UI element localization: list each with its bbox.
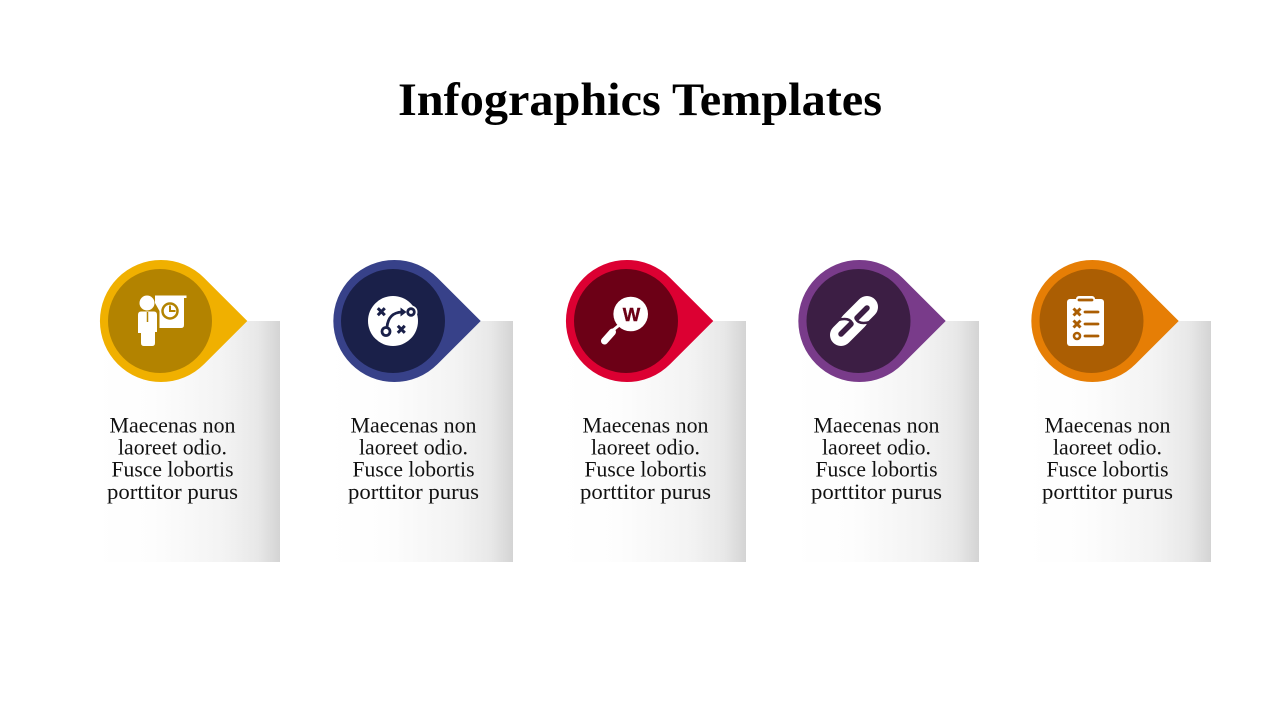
teardrop pin bbox=[333, 260, 481, 382]
body text: Maecenas non bbox=[350, 412, 476, 438]
inner circle bbox=[341, 269, 445, 373]
body text: porttitor purus bbox=[348, 479, 479, 504]
teardrop pin bbox=[566, 260, 713, 382]
body text: Maecenas non bbox=[814, 412, 940, 438]
body text bbox=[1042, 412, 1173, 504]
icon: chain link bbox=[838, 307, 870, 335]
body text bbox=[580, 412, 711, 504]
card background bbox=[1026, 321, 1211, 562]
icon: clipboard checklist bbox=[1067, 296, 1104, 346]
body text: porttitor purus bbox=[107, 479, 238, 504]
body text: laoreet odio. bbox=[822, 434, 931, 460]
body text: porttitor purus bbox=[811, 479, 942, 504]
panel: card 5 checklist bbox=[1026, 260, 1211, 562]
body text bbox=[348, 412, 479, 504]
body text: Fusce lobortis bbox=[816, 456, 938, 482]
inner circle bbox=[108, 269, 212, 373]
panel: card 2 strategy bbox=[328, 260, 513, 562]
icon: presenter with chart board bbox=[138, 296, 186, 346]
body text: laoreet odio. bbox=[591, 434, 700, 460]
body text: Fusce lobortis bbox=[112, 456, 234, 482]
icon: magnifying glass with W bbox=[604, 297, 648, 341]
body text bbox=[811, 412, 942, 504]
card background bbox=[561, 321, 746, 562]
panel: card 3 search bbox=[561, 260, 746, 562]
card background bbox=[793, 321, 979, 562]
body text: porttitor purus bbox=[1042, 479, 1173, 504]
inner circle bbox=[574, 269, 678, 373]
inner circle bbox=[806, 269, 910, 373]
inner circle bbox=[1040, 269, 1144, 373]
body text: laoreet odio. bbox=[1053, 434, 1162, 460]
icon: strategy play bbox=[368, 296, 418, 346]
panel: card 4 link bbox=[793, 260, 979, 562]
panel: card 1 presenter bbox=[95, 260, 280, 562]
body text: laoreet odio. bbox=[118, 434, 227, 460]
body text: laoreet odio. bbox=[359, 434, 468, 460]
card background bbox=[328, 321, 513, 562]
teardrop pin bbox=[100, 260, 247, 382]
body text: Maecenas non bbox=[1044, 412, 1170, 438]
icon: magnifying glass with W: W bbox=[623, 304, 641, 325]
teardrop pin bbox=[1031, 260, 1179, 382]
body text: Fusce lobortis bbox=[1046, 456, 1168, 482]
body text: Fusce lobortis bbox=[352, 456, 474, 482]
body text: Maecenas non bbox=[582, 412, 708, 438]
card background bbox=[95, 321, 280, 562]
body text: Maecenas non bbox=[110, 412, 236, 438]
teardrop pin bbox=[798, 260, 946, 382]
body text: porttitor purus bbox=[580, 479, 711, 504]
body text: Fusce lobortis bbox=[584, 456, 706, 482]
body text bbox=[107, 412, 238, 504]
title: Infographics Templates bbox=[398, 74, 882, 126]
